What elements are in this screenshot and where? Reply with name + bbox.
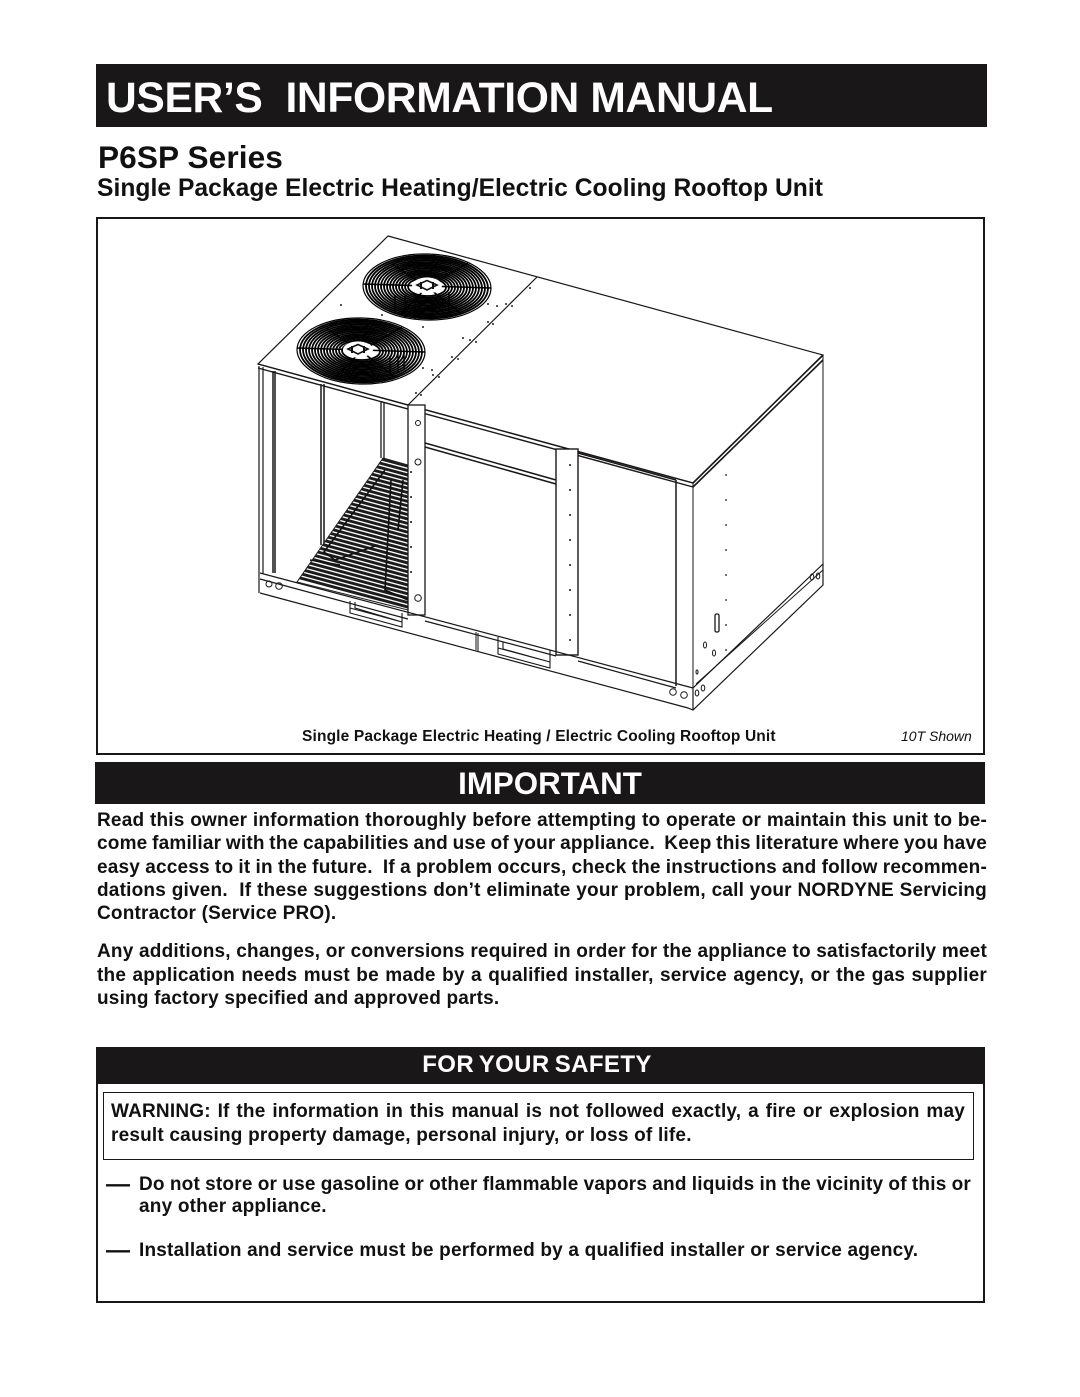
text block: additions and changes xyxy=(97,941,987,1009)
left cabinet opening xyxy=(259,366,384,593)
title banner xyxy=(96,64,987,127)
text block: owner information: come familiar with the capabilities and use of your appliance. Keep this literature where you have xyxy=(97,833,987,854)
safety item: qualified installer: Installation and service must be performed by a qualified installer or service agency. xyxy=(139,1240,918,1261)
text block: owner information: Contractor (Service PRO). xyxy=(97,903,336,924)
text block: additions and changes: Any additions, changes, or conversions required in order for the appliance to satisfactorily meet xyxy=(97,941,987,962)
safety item: flammable vapors: any other appliance. xyxy=(139,1196,327,1217)
text block: additions and changes: the application needs must be made by a qualified installer, service agency, or the gas supplier xyxy=(97,965,987,986)
panel: for your safety xyxy=(96,1047,985,1303)
text block: owner information: dations given. If these suggestions don’t eliminate your problem, call your NORDYNE Servicing xyxy=(97,880,987,901)
warning box xyxy=(103,1092,974,1160)
panel: product illustration frame xyxy=(96,217,985,755)
safety heading xyxy=(96,1047,985,1084)
text block: owner information xyxy=(97,810,987,924)
right side panel details xyxy=(696,475,726,674)
text block: owner information: Read this owner information thoroughly before attempting to operate or maintain this unit to be- xyxy=(97,810,987,831)
text block: additions and changes: using factory specified and approved parts. xyxy=(97,988,499,1009)
important banner xyxy=(95,762,985,804)
fan 1 xyxy=(362,252,492,322)
roof screws xyxy=(340,287,531,396)
warning box: result causing property damage, personal injury, or loss of life. xyxy=(111,1125,692,1146)
service panel posts xyxy=(556,355,823,710)
safety item: flammable vapors xyxy=(106,1171,971,1217)
warning box: WARNING: If the information in this manual is not followed exactly, a fire or explosion may xyxy=(111,1101,965,1122)
important banner: IMPORTANT xyxy=(458,766,642,801)
series heading: P6SP Series xyxy=(98,139,283,175)
top rail between posts xyxy=(425,443,676,484)
title banner: USER’S INFORMATION MANUAL xyxy=(106,74,773,122)
illustration caption: Single Package Electric Heating / Electric Cooling Rooftop Unit xyxy=(302,728,776,745)
illustration: rooftop unit xyxy=(256,235,824,711)
subtitle: Single Package Electric Heating/Electric Cooling Rooftop Unit xyxy=(97,175,823,202)
base rail xyxy=(260,564,823,710)
safety heading: FOR YOUR SAFETY xyxy=(422,1051,652,1078)
text block: owner information: easy access to it in the future. If a problem occurs, check the instructions and follow recommen- xyxy=(97,857,987,878)
model note: 10T Shown xyxy=(901,728,972,744)
safety item: flammable vapors: Do not store or use gasoline or other flammable vapors and liquids in the vicinity of this or xyxy=(139,1174,971,1195)
roof xyxy=(258,236,823,487)
fork slot left xyxy=(350,601,402,627)
center post xyxy=(408,405,425,615)
fork slot right xyxy=(498,637,550,668)
safety item: qualified installer: — xyxy=(106,1237,130,1264)
condenser coil grille xyxy=(296,457,408,610)
fan 2 xyxy=(296,316,426,386)
safety item: flammable vapors: — xyxy=(106,1171,130,1198)
